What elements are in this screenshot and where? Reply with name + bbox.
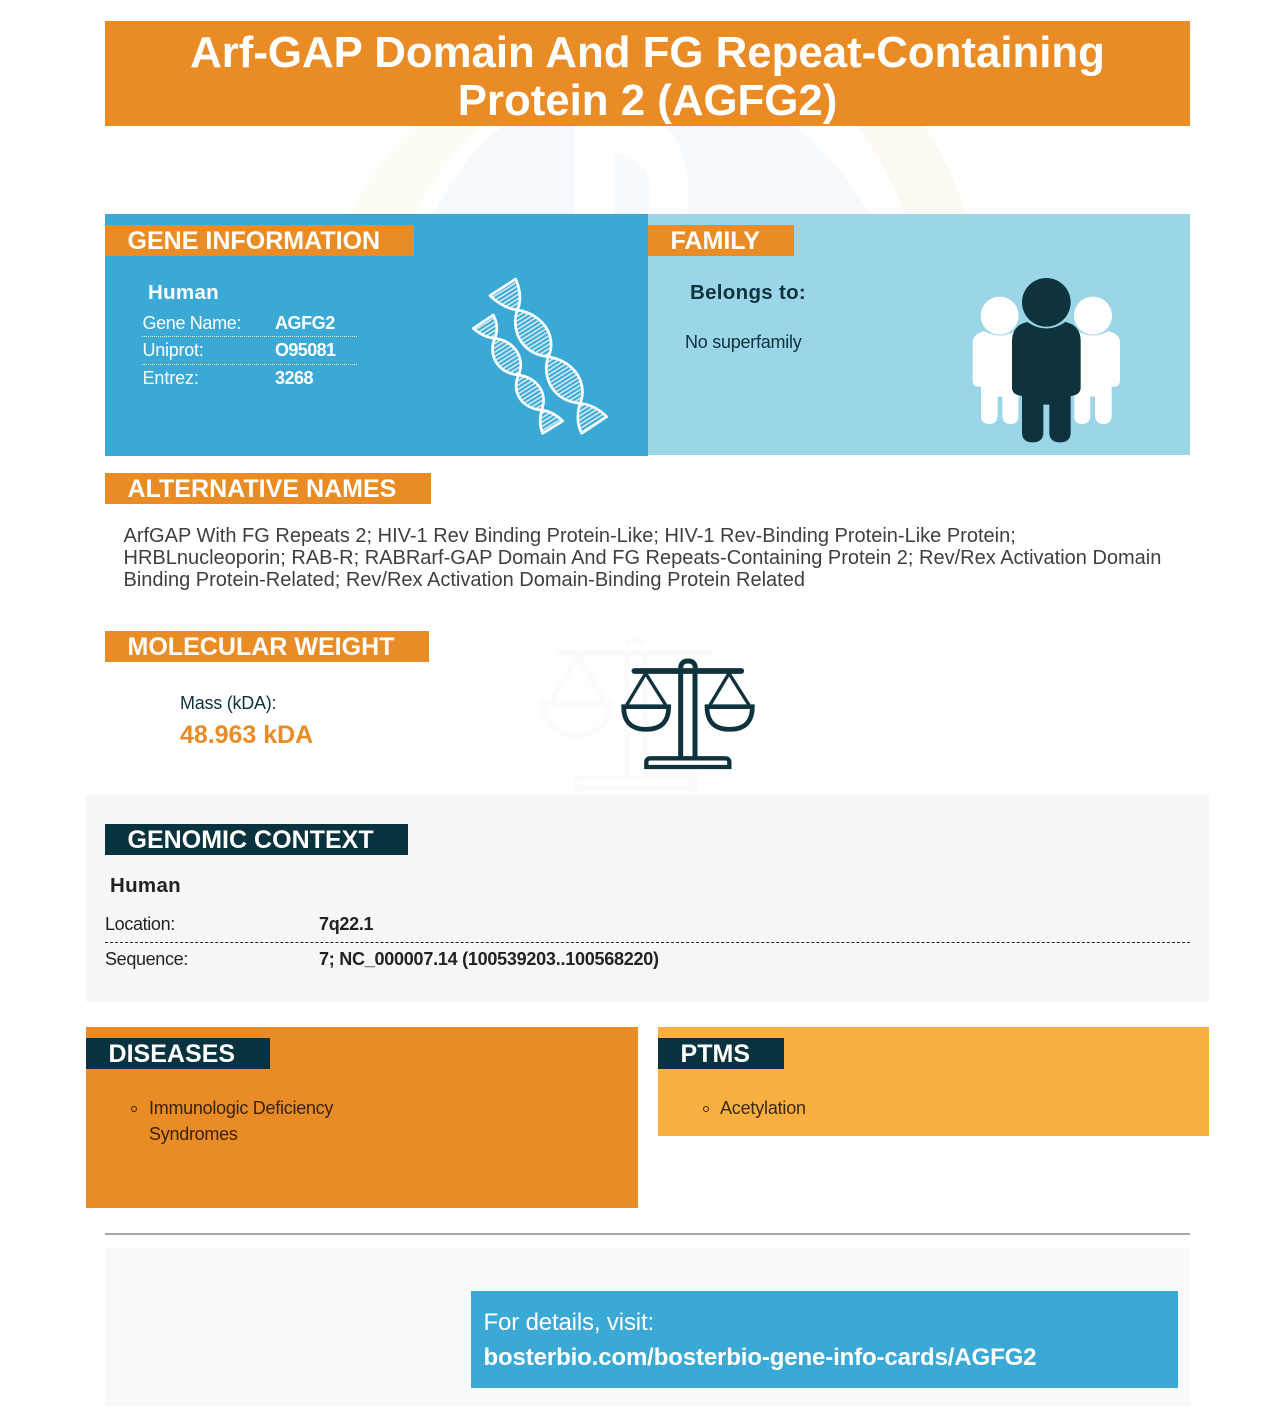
gene info table [142, 312, 357, 388]
title banner [105, 21, 1190, 126]
title banner: Protein 2 (AGFG2) [458, 76, 837, 125]
heading: genomic context: GENOMIC CONTEXT [128, 826, 374, 854]
disease item [149, 1098, 334, 1144]
callout: details link [471, 1291, 1178, 1388]
text: alternative names list: ArfGAP With FG Repeats 2; HIV-1 Rev Binding Protein-Like; HIV-1 Rev-Binding Protein-Like Protein; [124, 525, 1016, 547]
text: alternative names list [124, 525, 1161, 591]
bullet marker [703, 1106, 709, 1112]
row: uniprot: Uniprot: [142, 340, 204, 360]
species label: Human [148, 281, 219, 304]
heading: molecular weight: MOLECULAR WEIGHT [128, 633, 394, 661]
heading: diseases: DISEASES [108, 1040, 235, 1068]
heading: diseases [86, 1038, 270, 1069]
text: alternative names list: Binding Protein-Related; Rev/Rex Activation Domain-Binding Protein Related [124, 569, 805, 591]
row: sequence: Sequence: [105, 949, 188, 969]
row: gene name: Gene Name: [142, 312, 241, 332]
icon: faint scale watermark [520, 625, 770, 800]
row: uniprot: O95081 [275, 340, 335, 360]
panel: gene information [105, 214, 648, 456]
disease item: Immunologic Deficiency [149, 1098, 333, 1118]
row: sequence: 7; NC_000007.14 (100539203..100568220) [319, 949, 659, 969]
icon: dna strands [472, 278, 608, 435]
row: location: Location: [105, 914, 175, 934]
bullet marker [131, 1106, 137, 1112]
row: uniprot [142, 336, 357, 365]
row: entrez: Entrez: [142, 368, 199, 388]
heading: ptms: PTMS [680, 1040, 750, 1068]
callout label: For details, visit: [484, 1309, 654, 1336]
panel: diseases [86, 1027, 638, 1208]
heading: family [648, 225, 794, 256]
panel: ptms [658, 1027, 1209, 1136]
heading: ptms [658, 1038, 784, 1069]
row: location: 7q22.1 [319, 914, 373, 934]
text: alternative names list: HRBLnucleoporin; RAB-R; RABRarf-GAP Domain And FG Repeats-Containing Protein 2; Rev/Rex Activation Domain [124, 547, 1161, 569]
heading: alternative names: ALTERNATIVE NAMES [128, 475, 396, 503]
panel: genomic context [86, 795, 1209, 1002]
row: location [105, 908, 1190, 943]
superfamily value: No superfamily [685, 332, 802, 352]
heading: family: FAMILY [670, 227, 760, 255]
title banner: Arf-GAP Domain And FG Repeat-Containing [190, 28, 1105, 77]
footer panel [105, 1248, 1190, 1406]
callout url: bosterbio.com/bosterbio-gene-info-cards/AGFG2 [484, 1344, 1036, 1371]
panel: family [648, 214, 1190, 455]
mass label: Mass (kDA): [180, 693, 276, 713]
disease item: Syndromes [149, 1124, 238, 1144]
species label: Human [110, 874, 181, 897]
heading: gene information: GENE INFORMATION [128, 227, 380, 255]
ptm item: Acetylation [720, 1098, 806, 1118]
icon: group of people [972, 278, 1120, 442]
background watermark logo [350, 126, 966, 214]
row: entrez [142, 368, 313, 388]
icon: balance scale [621, 658, 755, 770]
row: gene name [142, 308, 357, 337]
row: gene name: AGFG2 [275, 312, 335, 332]
mass value: 48.963 kDA [180, 721, 313, 749]
footer divider [105, 1233, 1190, 1235]
belongs to label: Belongs to: [690, 281, 806, 304]
row: sequence [105, 949, 659, 969]
row: entrez: 3268 [275, 368, 313, 388]
